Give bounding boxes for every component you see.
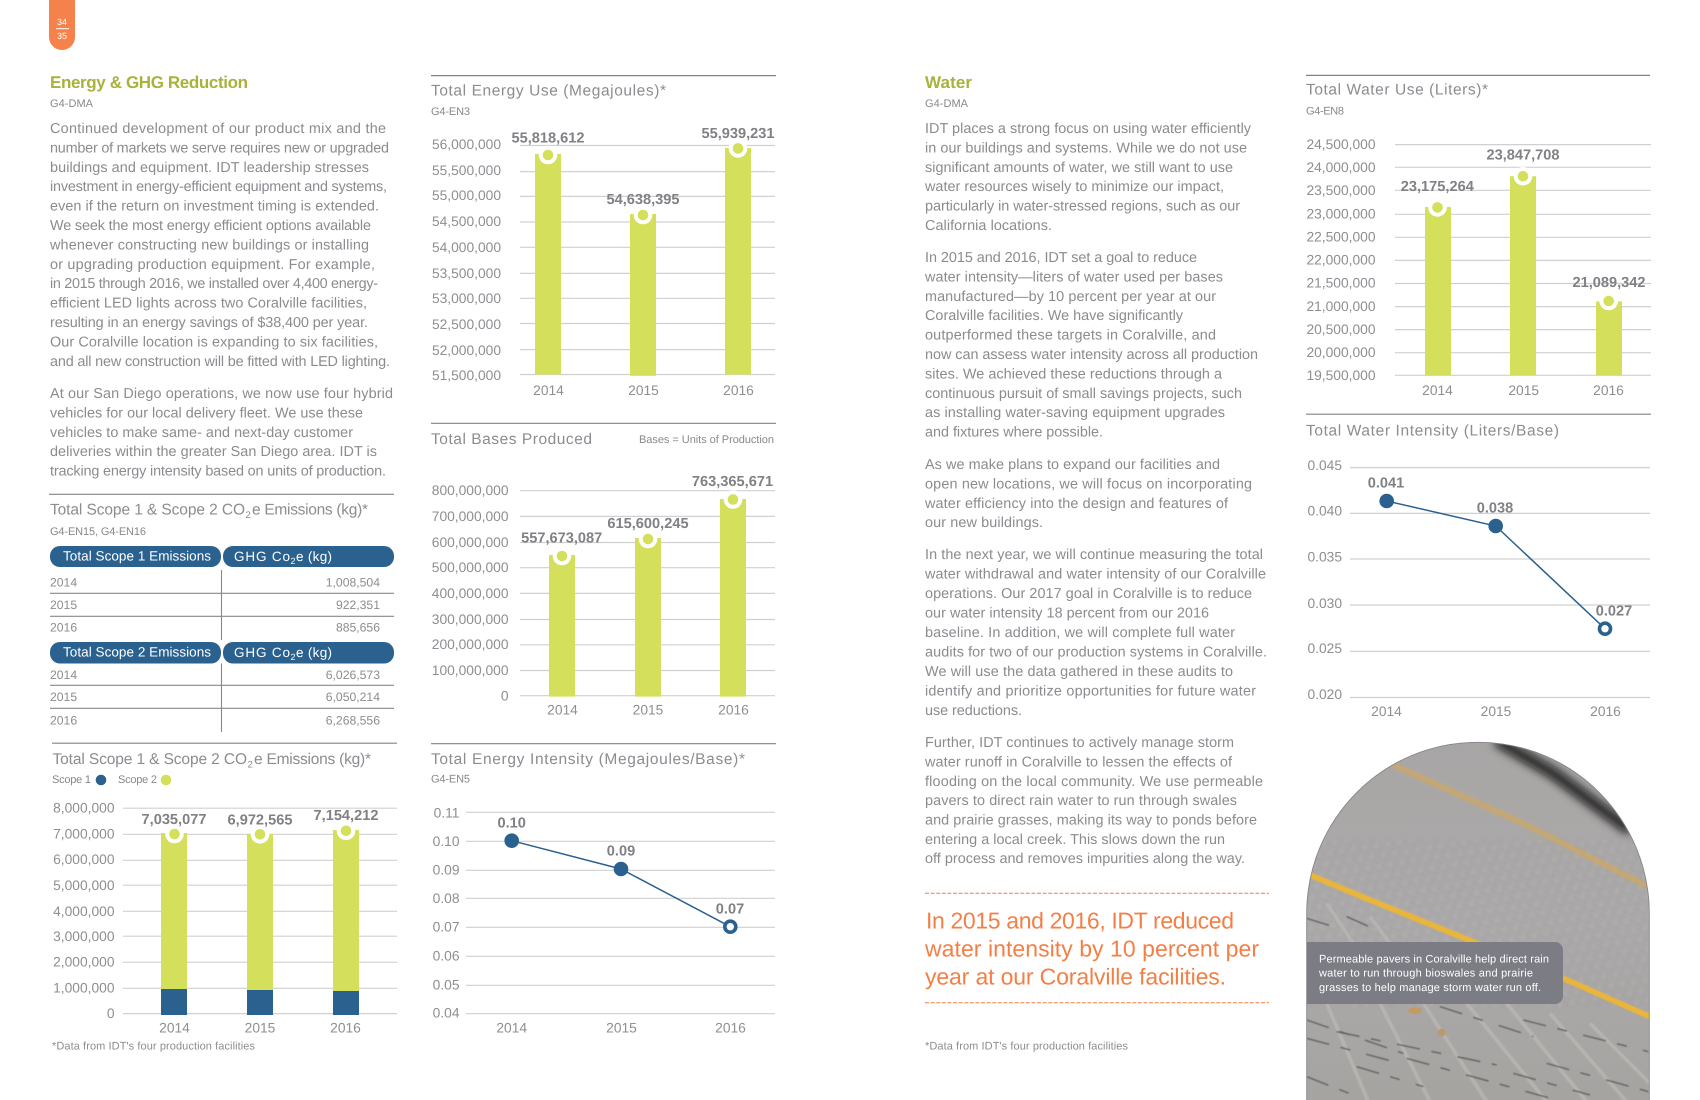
text block: water paragraph five: Further, IDT continues to actively manage storm — [925, 735, 1234, 751]
legend: Scope 2 — [118, 774, 157, 786]
text block: water paragraph four — [924, 547, 1267, 719]
bar: 2015 — [607, 516, 689, 718]
photo caption: Permeable pavers in Coralville help direct rain — [1319, 953, 1549, 965]
grid and axis — [53, 800, 397, 1021]
chart title: 2 — [248, 760, 253, 770]
grid and axis: 0.035 — [1307, 550, 1342, 565]
chart title: Total Bases Produced — [431, 431, 592, 448]
panel: total energy use bar chart — [431, 82, 775, 398]
grid and axis: 2014 — [496, 1021, 527, 1036]
grid and axis: 600,000,000 — [432, 535, 509, 550]
footnote: *Data from IDT's four production facilities — [52, 1040, 256, 1052]
grid and axis: 100,000,000 — [432, 663, 509, 678]
grid and axis: 0.04 — [433, 1006, 460, 1021]
table header: scope 1 GHG: e (kg) — [296, 549, 332, 564]
text block: energy paragraph one: investment in energy-efficient equipment and systems, — [50, 179, 387, 195]
bar: 2016: 2016 — [723, 383, 754, 398]
data line — [1368, 476, 1632, 636]
table rows: scope 2 — [50, 664, 394, 732]
bar: 2016 — [314, 808, 378, 1036]
table rows: scope 1: 922,351 — [336, 598, 380, 612]
text block: water paragraph one: in our buildings and systems. While we do not use — [925, 140, 1247, 156]
text block: water paragraph one: significant amounts of water, we still want to use — [925, 160, 1233, 176]
heading: energy and GHG reduction: Energy & GHG Reduction — [50, 73, 248, 92]
bar: 2015: 2015 — [628, 383, 659, 398]
bar: 2016: 2016 — [330, 1021, 361, 1036]
text block: water paragraph two: sites. We achieved these reductions through a — [925, 366, 1222, 382]
table header: scope 1: Total Scope 1 Emissions — [63, 548, 211, 563]
grid and axis: 0.040 — [1307, 504, 1342, 518]
text block: water paragraph two: In 2015 and 2016, IDT set a goal to reduce — [925, 250, 1197, 266]
grid and axis: 0 — [501, 688, 509, 704]
page number tab: 35 — [57, 31, 67, 41]
grid and axis: 53,000,000 — [432, 291, 501, 306]
text block: energy paragraph one: number of markets we serve requires new or upgraded — [50, 140, 389, 156]
grid and axis: 0.11 — [434, 805, 460, 820]
bar: 2016 — [1572, 275, 1646, 398]
grid and axis: 23,500,000 — [1306, 183, 1376, 198]
photo caption: water to run through bioswales and prairie — [1318, 968, 1533, 980]
panel: scope 1 and 2 stacked bar chart — [52, 751, 397, 1052]
grid and axis: 22,000,000 — [1306, 252, 1376, 268]
table rows: scope 1: 885,656 — [336, 621, 380, 635]
grid and axis: 2,000,000 — [53, 954, 115, 970]
table rows: scope 1: 2015 — [50, 598, 77, 612]
bar: 2014 — [1401, 179, 1475, 398]
bar: 2016: 2016 — [1593, 383, 1624, 398]
data line: 0.10 — [497, 815, 526, 831]
text block: water paragraph four: audits for two of our production systems in Coralville. — [925, 644, 1267, 660]
table title: e Emissions (kg)* — [252, 502, 368, 518]
grid and axis — [432, 483, 775, 704]
heading: water: Water — [925, 73, 972, 92]
text block: energy paragraph two: deliveries within the greater San Diego area. IDT is — [50, 444, 377, 460]
reference code: G4-DMA — [925, 98, 969, 110]
grid and axis: 2015 — [1481, 704, 1512, 719]
text block: energy paragraph one: even if the return on investment timing is extended. — [50, 199, 379, 215]
grid and axis: 55,500,000 — [432, 163, 501, 178]
text block: water paragraph five: off process and removes impurities along the way. — [925, 851, 1245, 867]
bar: 2014 — [521, 530, 602, 718]
grid and axis: 52,000,000 — [432, 343, 501, 358]
chart title: e Emissions (kg)* — [254, 751, 371, 768]
data line: 0.038 — [1477, 500, 1513, 516]
table rows: scope 2: 2014 — [50, 668, 77, 682]
table title: Total Scope 1 & Scope 2 CO — [50, 502, 245, 518]
table header: scope 1 GHG: GHG Co — [234, 549, 290, 564]
text block: water paragraph two: as installing water-saving equipment upgrades — [925, 405, 1225, 421]
text block: water paragraph three: As we make plans to expand our facilities and — [925, 457, 1220, 473]
bar: 2014 — [511, 130, 585, 398]
chart title: Total Energy Intensity (Megajoules/Base)* — [431, 751, 745, 768]
bar: 2016: 55,939,231 — [701, 126, 775, 142]
reference code: G4-EN5 — [431, 773, 470, 785]
grid and axis: 2016 — [715, 1021, 746, 1036]
grid and axis: 2015 — [606, 1021, 637, 1036]
table title: 2 — [246, 510, 251, 521]
chart title: Total Water Use (Liters)* — [1306, 82, 1488, 98]
text block: water paragraph four: use reductions. — [925, 703, 1022, 719]
grid and axis: 3,000,000 — [53, 929, 115, 944]
table rows: scope 1: 2016 — [50, 621, 77, 635]
text block: water paragraph two: now can assess water intensity across all production — [925, 347, 1258, 363]
panel: energy and GHG reduction text — [49, 73, 393, 480]
bar: 2015: 6,972,565 — [228, 812, 292, 828]
chart title: Total Scope 1 & Scope 2 CO — [52, 751, 247, 768]
table header: scope 2: Total Scope 2 Emissions — [63, 644, 211, 659]
text block: water paragraph four: In the next year, we will continue measuring the total — [925, 547, 1263, 563]
chart title — [52, 751, 371, 770]
callout: water intensity reduction — [924, 893, 1269, 1003]
bar: 2015 — [228, 812, 292, 1036]
grid and axis: 7,000,000 — [53, 826, 115, 842]
grid and axis: 800,000,000 — [432, 483, 509, 498]
text block: water paragraph one — [924, 121, 1252, 234]
bar: 2015: 2015 — [633, 703, 664, 718]
text block: water paragraph two: outperformed these targets in Coralville, and — [925, 328, 1216, 344]
text block: water paragraph four: water withdrawal and water intensity of our Coralville — [924, 567, 1266, 583]
grid and axis — [433, 805, 775, 1036]
grid and axis: 0.030 — [1307, 596, 1342, 611]
table header: scope 2 GHG — [223, 642, 394, 664]
grid and axis: 54,500,000 — [432, 214, 501, 229]
panel: total energy intensity line chart — [431, 751, 775, 1036]
table reference code: G4-EN15, G4-EN16 — [50, 526, 146, 538]
text block: energy paragraph one: We seek the most energy efficient options available — [50, 218, 371, 234]
grid and axis: 56,000,000 — [432, 137, 501, 152]
grid and axis: 2014 — [1371, 704, 1402, 719]
grid and axis: 0.06 — [433, 949, 460, 964]
text block: water paragraph one: IDT places a strong focus on using water efficiently — [925, 121, 1252, 137]
grid and axis: 24,000,000 — [1306, 160, 1376, 175]
reference code: G4-EN3 — [431, 106, 470, 118]
grid and axis: 21,000,000 — [1306, 299, 1376, 314]
text block: water paragraph four: baseline. In addition, we will complete full water — [925, 625, 1235, 641]
text block: water paragraph one: particularly in water-stressed regions, such as our — [925, 199, 1240, 215]
text block: energy paragraph two: tracking energy intensity based on units of production. — [50, 464, 386, 480]
chart title: Total Energy Use (Megajoules)* — [431, 82, 666, 100]
legend — [52, 774, 171, 786]
text block: water paragraph three: our new buildings. — [925, 515, 1043, 531]
text block: energy paragraph one: and all new construction will be fitted with LED lighting. — [50, 354, 390, 370]
text block: water paragraph five: and prairie grasses, making its way to ponds before — [925, 812, 1257, 828]
grid and axis: 0.020 — [1307, 687, 1342, 702]
data line: 0.041 — [1368, 476, 1404, 492]
callout: water intensity reduction: In 2015 and 2016, IDT reduced — [926, 908, 1234, 934]
text block: energy paragraph one: efficient LED lights across two Coralville facilities, — [50, 296, 367, 312]
grid and axis: 8,000,000 — [53, 800, 115, 816]
text block: water paragraph five: pavers to direct rain water to run through swales — [925, 793, 1237, 809]
grid and axis: 0.07 — [433, 920, 460, 935]
grid and axis: 4,000,000 — [53, 904, 115, 919]
grid and axis — [1306, 137, 1651, 383]
text block: energy paragraph one: Our Coralville location is expanding to six facilities, — [50, 334, 378, 350]
chart title: Total Water Intensity (Liters/Base) — [1306, 422, 1559, 440]
text block: energy paragraph one: buildings and equipment. IDT leadership stresses — [50, 160, 369, 176]
text block: energy paragraph one: resulting in an energy savings of $38,400 per year. — [50, 315, 368, 331]
text block: water paragraph two — [924, 250, 1258, 441]
data line — [497, 815, 744, 934]
grid and axis: 700,000,000 — [432, 509, 509, 524]
table rows: scope 1 — [50, 570, 394, 640]
grid and axis: 55,000,000 — [432, 188, 501, 203]
bar: 2014 — [142, 812, 206, 1036]
bar: 2014: 23,175,264 — [1401, 179, 1475, 195]
callout: water intensity reduction: year at our Coralville facilities. — [925, 964, 1226, 990]
grid and axis: 0.025 — [1307, 641, 1342, 656]
data line: 0.07 — [716, 902, 744, 918]
table header: scope 2 GHG: GHG Co — [234, 645, 290, 660]
grid and axis: 20,500,000 — [1306, 322, 1376, 337]
bar: 2016: 7,154,212 — [314, 808, 378, 824]
table rows: scope 1: 1,008,504 — [326, 576, 380, 590]
text block: water paragraph two: Coralville facilities. We have significantly — [925, 308, 1184, 324]
grid and axis — [1307, 458, 1650, 719]
grid and axis: 23,000,000 — [1306, 206, 1376, 222]
bar: 2015: 615,600,245 — [607, 516, 689, 532]
grid and axis: 20,000,000 — [1306, 345, 1376, 360]
page number tab — [49, 0, 75, 50]
bar: 2016 — [701, 126, 775, 398]
text block: water paragraph three — [924, 457, 1252, 531]
data line: 0.027 — [1596, 604, 1632, 620]
text block: water paragraph one: water resources wisely to minimize our impact, — [924, 179, 1224, 195]
table rows: scope 2: 2016 — [50, 713, 77, 727]
bar: 2014: 7,035,077 — [142, 812, 206, 828]
table header: scope 1 — [50, 546, 221, 567]
data line: 0.09 — [607, 843, 635, 859]
bar: 2014: 557,673,087 — [521, 530, 602, 546]
grid and axis: 54,000,000 — [432, 240, 501, 255]
bar: 2015: 54,638,395 — [606, 192, 680, 208]
grid and axis: 1,000,000 — [53, 980, 115, 996]
panel: water text — [924, 73, 1267, 867]
bar: 2014: 2014 — [533, 383, 564, 398]
grid and axis: 500,000,000 — [432, 560, 509, 575]
grid and axis: 400,000,000 — [432, 586, 509, 601]
text block: energy paragraph two: At our San Diego operations, we now use four hybrid — [50, 386, 393, 402]
text block: water paragraph five: water runoff in Coralville to lessen the effects of — [924, 754, 1233, 770]
text block: energy paragraph one: or upgrading production equipment. For example, — [50, 257, 375, 273]
text block: water paragraph four: our water intensity 18 percent from our 2016 — [925, 606, 1209, 622]
panel: total water intensity line chart — [1306, 422, 1650, 719]
text block: energy paragraph one: whenever constructing new buildings or installing — [49, 237, 369, 253]
grid and axis: 22,500,000 — [1306, 230, 1376, 244]
text block: water paragraph one: California locations. — [925, 218, 1052, 234]
table rows: scope 2: 6,268,556 — [326, 713, 380, 727]
table header: scope 2 GHG: e (kg) — [296, 645, 332, 660]
grid and axis: 0 — [107, 1006, 115, 1021]
bar: 2015 — [1486, 148, 1560, 398]
grid and axis: 0.10 — [433, 834, 460, 849]
reference code: G4-EN8 — [1306, 106, 1344, 118]
photo caption — [1307, 942, 1563, 1004]
text block: energy paragraph one: Continued development of our product mix and the — [50, 121, 386, 137]
grid and axis: 21,500,000 — [1306, 276, 1376, 290]
text block: water paragraph three: open new locations, we will focus on incorporating — [925, 476, 1252, 492]
text block: energy paragraph two: vehicles for our local delivery fleet. We use these — [50, 405, 363, 421]
bar: 2016: 2016 — [718, 703, 749, 718]
grid and axis: 0.045 — [1307, 458, 1342, 473]
photo caption: grasses to help manage storm water run off. — [1319, 982, 1541, 994]
bar: 2014: 2014 — [547, 703, 578, 718]
table header: scope 1 GHG — [223, 546, 394, 567]
grid and axis: 0.08 — [433, 891, 460, 906]
reference code: G4-DMA — [50, 98, 94, 110]
bar: 2014: 2014 — [159, 1021, 190, 1036]
bar: 2015: 23,847,708 — [1486, 148, 1560, 164]
bar: 2016: 763,365,671 — [692, 474, 773, 490]
bar: 2014: 2014 — [1422, 383, 1453, 398]
table rows: scope 2: 6,026,573 — [326, 668, 380, 682]
text block: energy paragraph two: vehicles to make same- and next-day customer — [50, 425, 353, 441]
bar: 2016: 21,089,342 — [1572, 275, 1646, 291]
page number tab: 34 — [57, 17, 67, 27]
text block: water paragraph two: manufactured—by 10 percent per year at our — [925, 289, 1216, 305]
table header: scope 2 — [50, 642, 221, 664]
photo: permeable pavers — [1300, 740, 1655, 1100]
text block: energy paragraph two — [50, 386, 393, 480]
unit note: Bases = Units of Production — [639, 434, 774, 446]
grid and axis — [432, 137, 775, 383]
bar: 2015: 2015 — [245, 1021, 276, 1036]
text block: water paragraph two: water intensity—liters of water used per bases — [924, 269, 1223, 285]
grid and axis: 300,000,000 — [432, 612, 509, 627]
legend: Scope 1 — [52, 774, 91, 786]
text block: water paragraph five — [924, 735, 1263, 867]
text block: water paragraph five: entering a local creek. This slows down the run — [925, 832, 1225, 848]
callout: water intensity reduction: water intensity by 10 percent per — [924, 936, 1259, 962]
text block: water paragraph two: continuous pursuit of small savings projects, such — [925, 386, 1242, 402]
text block: water paragraph four: identify and prioritize opportunities for future water — [925, 683, 1256, 699]
grid and axis: 24,500,000 — [1306, 137, 1376, 152]
bar: 2016 — [692, 474, 773, 718]
text block: energy paragraph one — [49, 121, 390, 370]
grid and axis: 52,500,000 — [432, 317, 501, 332]
table rows: scope 2: 6,050,214 — [326, 690, 380, 704]
text block: energy paragraph one: in 2015 through 2016, we installed over 4,400 energy- — [50, 276, 378, 292]
grid and axis: 2016 — [1590, 704, 1621, 719]
grid and axis: 200,000,000 — [432, 637, 509, 652]
footnote: *Data from IDT's four production facilities — [925, 1040, 1128, 1052]
grid and axis: 6,000,000 — [53, 852, 115, 867]
bar: 2014: 55,818,612 — [511, 130, 585, 146]
panel: total bases produced bar chart — [431, 431, 775, 718]
grid and axis: 0.09 — [433, 863, 460, 878]
table header: scope 1 GHG: 2 — [290, 556, 296, 566]
panel: total water use bar chart — [1306, 82, 1651, 398]
panel: emissions table — [50, 502, 394, 732]
text block: water paragraph four: We will use the data gathered in these audits to — [925, 664, 1233, 680]
bar: 2015 — [606, 192, 680, 398]
text block: water paragraph four: operations. Our 2017 goal in Coralville is to reduce — [925, 586, 1252, 602]
grid and axis: 51,500,000 — [432, 368, 501, 383]
table rows: scope 1: 2014 — [50, 576, 77, 590]
grid and axis: 19,500,000 — [1306, 368, 1376, 383]
grid and axis: 5,000,000 — [53, 878, 115, 893]
text block: water paragraph two: and fixtures where possible. — [925, 425, 1103, 441]
table header: scope 2 GHG: 2 — [290, 652, 296, 662]
table rows: scope 2: 2015 — [50, 690, 77, 704]
grid and axis: 53,500,000 — [432, 266, 501, 281]
bar: 2015: 2015 — [1508, 383, 1539, 398]
grid and axis: 0.05 — [433, 977, 460, 992]
text block: water paragraph five: flooding on the local community. We use permeable — [925, 774, 1263, 790]
text block: water paragraph three: water efficiency into the design and features of — [924, 496, 1229, 512]
table title — [50, 502, 368, 521]
